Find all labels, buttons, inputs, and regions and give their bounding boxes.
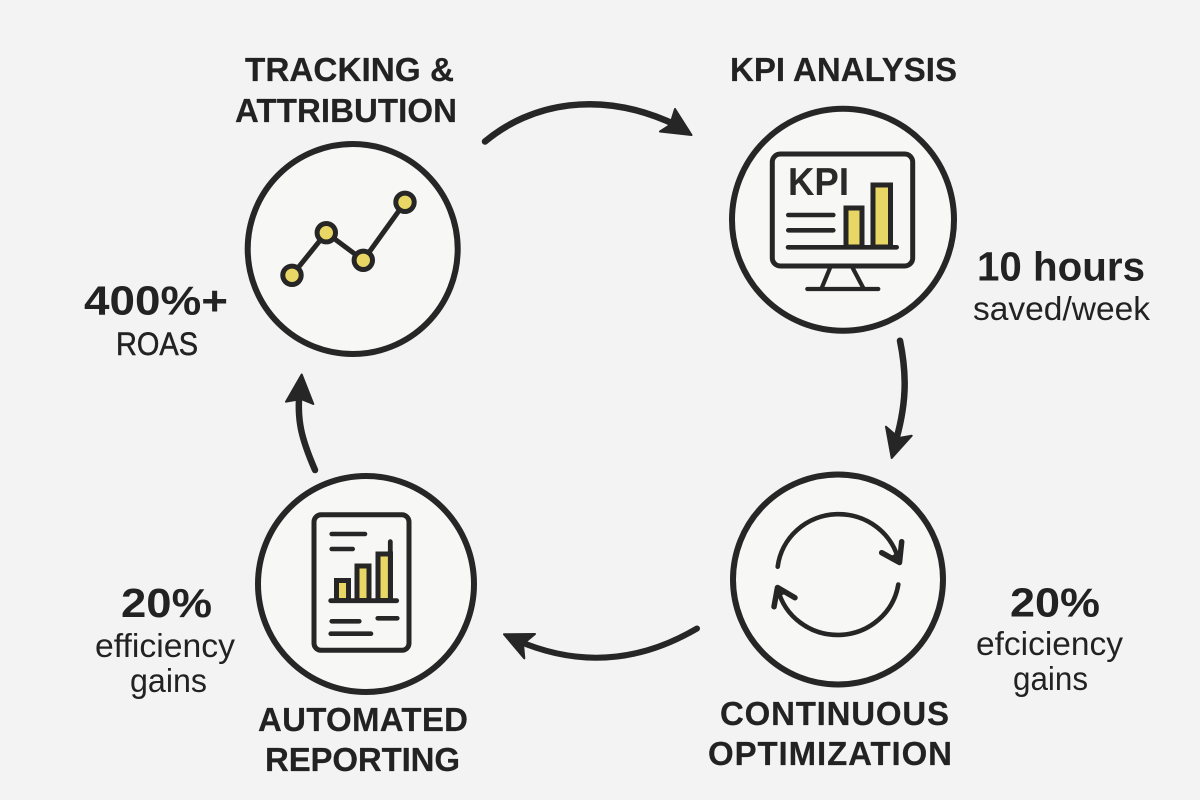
heading: tracking and attribution [235,51,457,129]
stat: 10 hours saved per week: 10 hours [977,244,1145,290]
stat: 10 hours saved per week [973,244,1151,327]
heading: continuous optimization [708,695,952,772]
icon: KPI monitor in circle [732,109,954,331]
stat: 20% efficiency gains, left [95,580,236,699]
icon: refresh arrows in circle [733,474,943,684]
heading: KPI analysis: KPI ANALYSIS [730,51,957,88]
stat: 20% efficiency gains, left: 20% [121,580,212,626]
icon: line chart in circle [248,144,458,354]
arrow: reporting to tracking [286,374,315,470]
heading: tracking and attribution: TRACKING & [245,51,454,88]
heading: continuous optimization: OPTIMIZATION [708,735,952,772]
arrow: optimization to reporting [504,628,697,658]
icon: report document in circle [258,476,474,692]
stat: 10 hours saved per week: saved/week [973,290,1151,327]
heading: automated reporting: REPORTING [265,741,460,778]
heading: automated reporting: AUTOMATED [258,701,468,738]
heading: continuous optimization: CONTINUOUS [720,695,949,732]
heading: tracking and attribution: ATTRIBUTION [235,92,457,129]
arrow: tracking to KPI [485,104,692,142]
stat: 400%+ ROAS: ROAS [116,326,198,362]
stat: 20% efficiency gains, right: efciciency [976,625,1124,662]
stat: 400%+ ROAS [84,278,228,362]
stat: 20% efficiency gains, right: gains [1013,660,1088,697]
arrow: KPI to optimization [886,341,912,458]
stat: 400%+ ROAS: 400%+ [84,278,228,324]
stat: 20% efficiency gains, left: efficiency [95,627,236,664]
stat: 20% efficiency gains, right [976,580,1124,697]
heading: automated reporting [258,701,468,778]
icon: KPI monitor in circle: KPI [788,161,849,204]
stat: 20% efficiency gains, right: 20% [1010,580,1100,626]
stat: 20% efficiency gains, left: gains [130,662,207,699]
